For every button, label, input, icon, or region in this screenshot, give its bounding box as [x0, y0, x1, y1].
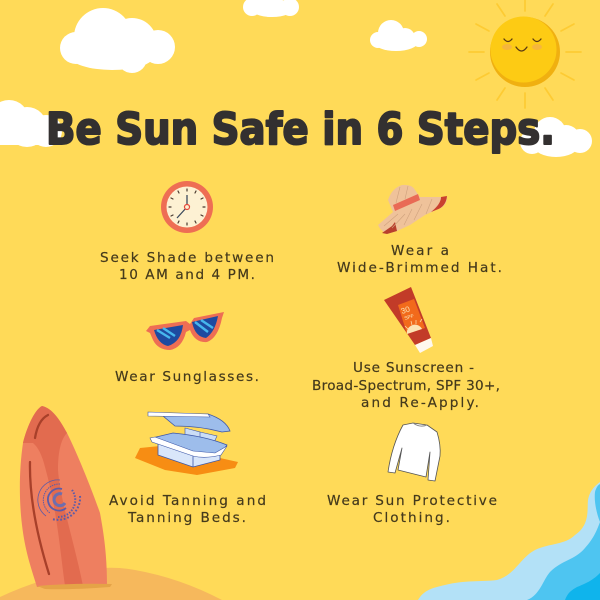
- text: wear a hat: Wide-Brimmed Hat.: [337, 260, 502, 276]
- cloud: near sun: [370, 20, 427, 51]
- text: avoid tanning: Tanning Beds.: [127, 510, 246, 526]
- water waves: [418, 482, 600, 600]
- icon: wide-brimmed hat: [378, 185, 447, 234]
- text: seek shade: 10 AM and 4 PM.: [119, 267, 255, 283]
- icon: long-sleeve shirt: [388, 423, 440, 481]
- text: protective clothing: [327, 493, 497, 526]
- icon: sunscreen tube: 30: [400, 304, 412, 316]
- sand at board base: [37, 584, 112, 589]
- text: protective clothing: Clothing.: [373, 510, 450, 526]
- logo: spiral on surfboard: [38, 480, 80, 520]
- text: avoid tanning: [109, 493, 266, 526]
- icon: clock: [161, 181, 213, 233]
- text: wear a hat: [337, 243, 502, 276]
- cloud: left edge: [0, 100, 62, 147]
- icon: sunscreen tube: [384, 287, 433, 353]
- text: sunglasses: Wear Sunglasses.: [115, 369, 259, 385]
- text: use sunscreen: Broad-Spectrum, SPF 30+,: [312, 378, 500, 394]
- cloud: top centre-left: [60, 8, 175, 73]
- cloud: behind title end: [520, 117, 592, 157]
- sand dune: [0, 568, 222, 600]
- icon: smiling sun: [469, 0, 581, 108]
- cloud: top edge: [243, 0, 299, 17]
- text: use sunscreen: [312, 360, 500, 411]
- text: use sunscreen: Use Sunscreen -: [353, 360, 474, 376]
- text: use sunscreen: and Re-Apply.: [361, 395, 479, 411]
- icon: sunscreen tube: SPF: [404, 313, 415, 322]
- text: avoid tanning: Avoid Tanning and: [109, 493, 266, 509]
- text: seek shade: Seek Shade between: [100, 250, 274, 266]
- text: wear a hat: Wear a: [391, 243, 449, 259]
- text: protective clothing: Wear Sun Protective: [327, 493, 497, 509]
- icon: tanning bed: [135, 412, 238, 475]
- icon: surfboard: [20, 406, 107, 587]
- text: seek shade: [100, 250, 274, 283]
- icon: sunglasses: [146, 312, 224, 350]
